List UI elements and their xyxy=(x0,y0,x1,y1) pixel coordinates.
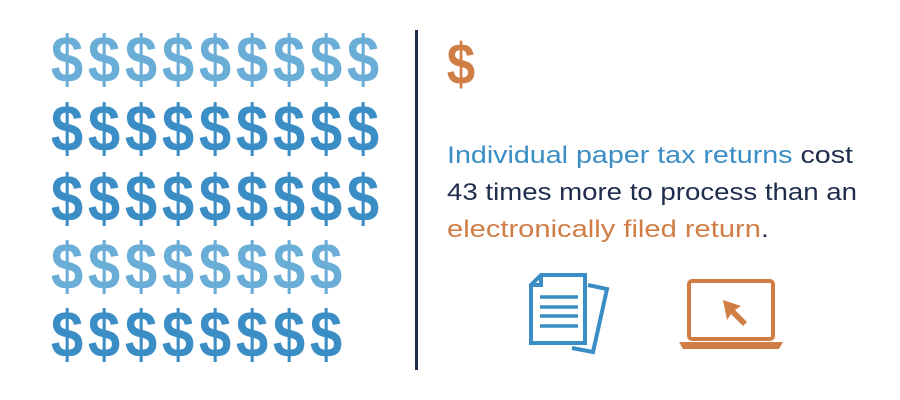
row 2 xyxy=(51,93,379,166)
row 4: $ xyxy=(236,231,268,304)
row 2: $ xyxy=(310,93,342,166)
row 3: $ xyxy=(88,163,120,236)
row 3 xyxy=(51,163,379,236)
row 5: $ xyxy=(273,299,305,372)
vertical divider xyxy=(415,30,418,370)
row 5: $ xyxy=(51,299,83,372)
row 1: $ xyxy=(51,24,83,97)
row 3: $ xyxy=(162,163,194,236)
row 2: $ xyxy=(199,93,231,166)
row 2: $ xyxy=(88,93,120,166)
row 4 xyxy=(51,231,342,304)
statement text: Individual paper tax returns cost xyxy=(447,142,853,169)
row 3: $ xyxy=(125,163,157,236)
row 1: $ xyxy=(125,24,157,97)
row 5: $ xyxy=(199,299,231,372)
statement text: 43 times more to process than an xyxy=(447,179,857,206)
row 1 xyxy=(51,24,379,97)
row 3: $ xyxy=(51,163,83,236)
row 4: $ xyxy=(162,231,194,304)
row 1: $ xyxy=(88,24,120,97)
row 2: $ xyxy=(125,93,157,166)
row 1: $ xyxy=(199,24,231,97)
row 4: $ xyxy=(51,231,83,304)
row 4: $ xyxy=(125,231,157,304)
row 5: $ xyxy=(88,299,120,372)
dollar sign grid (43 dollars) xyxy=(51,24,379,372)
orange single dollar: $ xyxy=(447,32,475,97)
row 2: $ xyxy=(347,93,379,166)
row 2: $ xyxy=(162,93,194,166)
row 5: $ xyxy=(162,299,194,372)
row 2: $ xyxy=(51,93,83,166)
row 1: $ xyxy=(347,24,379,97)
row 2: $ xyxy=(236,93,268,166)
row 4: $ xyxy=(199,231,231,304)
row 1: $ xyxy=(273,24,305,97)
icon: laptop with cursor xyxy=(679,281,783,349)
row 4: $ xyxy=(273,231,305,304)
row 1: $ xyxy=(162,24,194,97)
row 1: $ xyxy=(310,24,342,97)
statement text: electronically filed return . xyxy=(447,216,769,243)
row 5: $ xyxy=(310,299,342,372)
row 1: $ xyxy=(236,24,268,97)
row 5: $ xyxy=(236,299,268,372)
row 3: $ xyxy=(199,163,231,236)
statement text xyxy=(447,142,857,243)
icon: paper documents xyxy=(531,275,607,352)
row 3: $ xyxy=(273,163,305,236)
row 5 xyxy=(51,299,342,372)
row 5: $ xyxy=(125,299,157,372)
row 3: $ xyxy=(236,163,268,236)
row 3: $ xyxy=(347,163,379,236)
row 4: $ xyxy=(310,231,342,304)
row 4: $ xyxy=(88,231,120,304)
row 3: $ xyxy=(310,163,342,236)
row 2: $ xyxy=(273,93,305,166)
